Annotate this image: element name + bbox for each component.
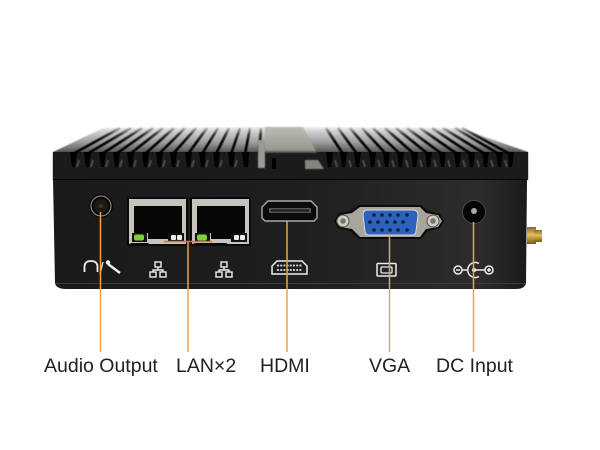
icon: DC polarity: [454, 263, 493, 278]
chassis top with heat sink fins: [53, 127, 528, 180]
label: DC Input: DC Input: [436, 355, 514, 377]
port: audio jack: [89, 194, 113, 218]
label: HDMI: HDMI: [260, 355, 310, 377]
device: mini PC chassis: [53, 127, 528, 289]
centre heat sink block: [265, 127, 317, 153]
light stripes beside centre block: [258, 140, 265, 168]
icon: LAN 1: [150, 262, 166, 277]
port: DC input: [462, 200, 486, 224]
label: Audio Output: Audio Output: [44, 355, 158, 377]
icon: HDMI: [272, 261, 307, 274]
port: VGA: [334, 205, 444, 239]
port: LAN 1: [127, 197, 188, 246]
chassis front panel: [53, 179, 527, 289]
icon: LAN 2: [216, 262, 232, 277]
icon: VGA: [377, 264, 396, 276]
callout lines: [100, 212, 474, 352]
port: HDMI: [262, 201, 317, 221]
fin slot notches: [70, 152, 514, 167]
fin bevel highlights: [77, 160, 507, 167]
antenna connector: [527, 227, 542, 244]
port: LAN 2: [190, 197, 251, 246]
label: VGA: VGA: [369, 355, 410, 377]
icon: headphone and microphone: [84, 260, 120, 274]
labels: [44, 355, 514, 377]
label: LAN×2: LAN×2: [176, 355, 236, 377]
